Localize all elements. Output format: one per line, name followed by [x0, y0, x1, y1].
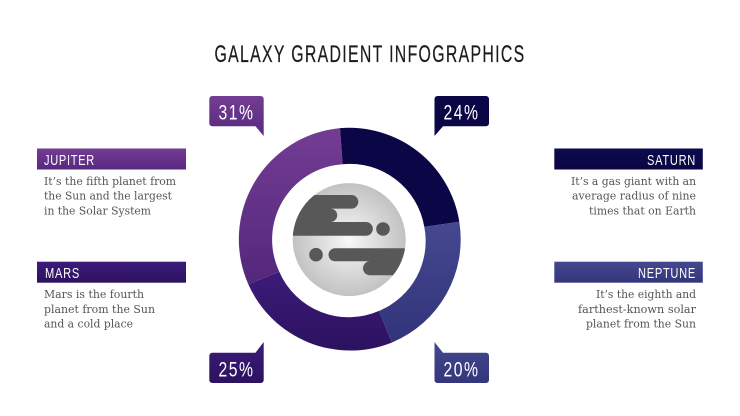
icon: planet: [285, 183, 410, 296]
text: Mars description: planet from the Sun: [44, 303, 155, 316]
callout: 20%: 20%: [444, 358, 480, 382]
segment: Jupiter 31%: [239, 128, 343, 284]
text: Neptune description: [578, 288, 697, 330]
heading: Mars: MARS: [45, 265, 80, 282]
text: Jupiter description: [44, 175, 176, 218]
text: Mars description: [44, 288, 155, 330]
text: Jupiter description: It’s the fifth planet from: [44, 175, 176, 188]
panel: Neptune: [554, 262, 703, 330]
text: Saturn description: It’s a gas giant with an: [571, 175, 696, 188]
panel: Saturn: [554, 148, 703, 218]
text: Mars description: and a cold place: [44, 318, 133, 330]
text: Neptune description: It’s the eighth and: [596, 288, 696, 301]
text: Saturn description: times that on Earth: [589, 204, 696, 218]
callout: 25%: [209, 342, 264, 383]
callout: 24%: 24%: [444, 102, 480, 124]
heading: Neptune: [554, 262, 703, 283]
heading: Saturn: SATURN: [647, 152, 696, 169]
text: Neptune description: planet from the Sun: [586, 318, 696, 330]
panel: Mars: [37, 262, 186, 330]
panel: Jupiter: [37, 148, 186, 218]
text: Mars description: Mars is the fourth: [44, 288, 144, 301]
callout: 24%: [434, 96, 489, 136]
segment: Saturn 24%: [340, 128, 459, 227]
text: Neptune description: farthest-known solar: [578, 303, 697, 316]
heading: Saturn: [554, 148, 703, 170]
donut chart: [239, 128, 461, 351]
heading: Jupiter: JUPITER: [44, 152, 95, 169]
callout: 31%: 31%: [218, 102, 254, 124]
heading: Mars: [37, 262, 186, 283]
text: Jupiter description: in the Solar System: [44, 204, 151, 218]
segment: Mars 25%: [248, 272, 392, 351]
segment: Neptune 20%: [379, 222, 461, 343]
text: Saturn description: average radius of nine: [572, 190, 696, 202]
title: GALAXY GRADIENT INFOGRAPHICS: [214, 41, 526, 68]
callout: 20%: [434, 342, 489, 383]
callout: 31%: [209, 96, 264, 136]
text: Saturn description: [571, 175, 696, 218]
heading: Jupiter: [37, 148, 186, 170]
callout: 25%: 25%: [218, 358, 254, 382]
text: Jupiter description: the Sun and the largest: [44, 190, 172, 202]
heading: Neptune: NEPTUNE: [638, 265, 696, 282]
